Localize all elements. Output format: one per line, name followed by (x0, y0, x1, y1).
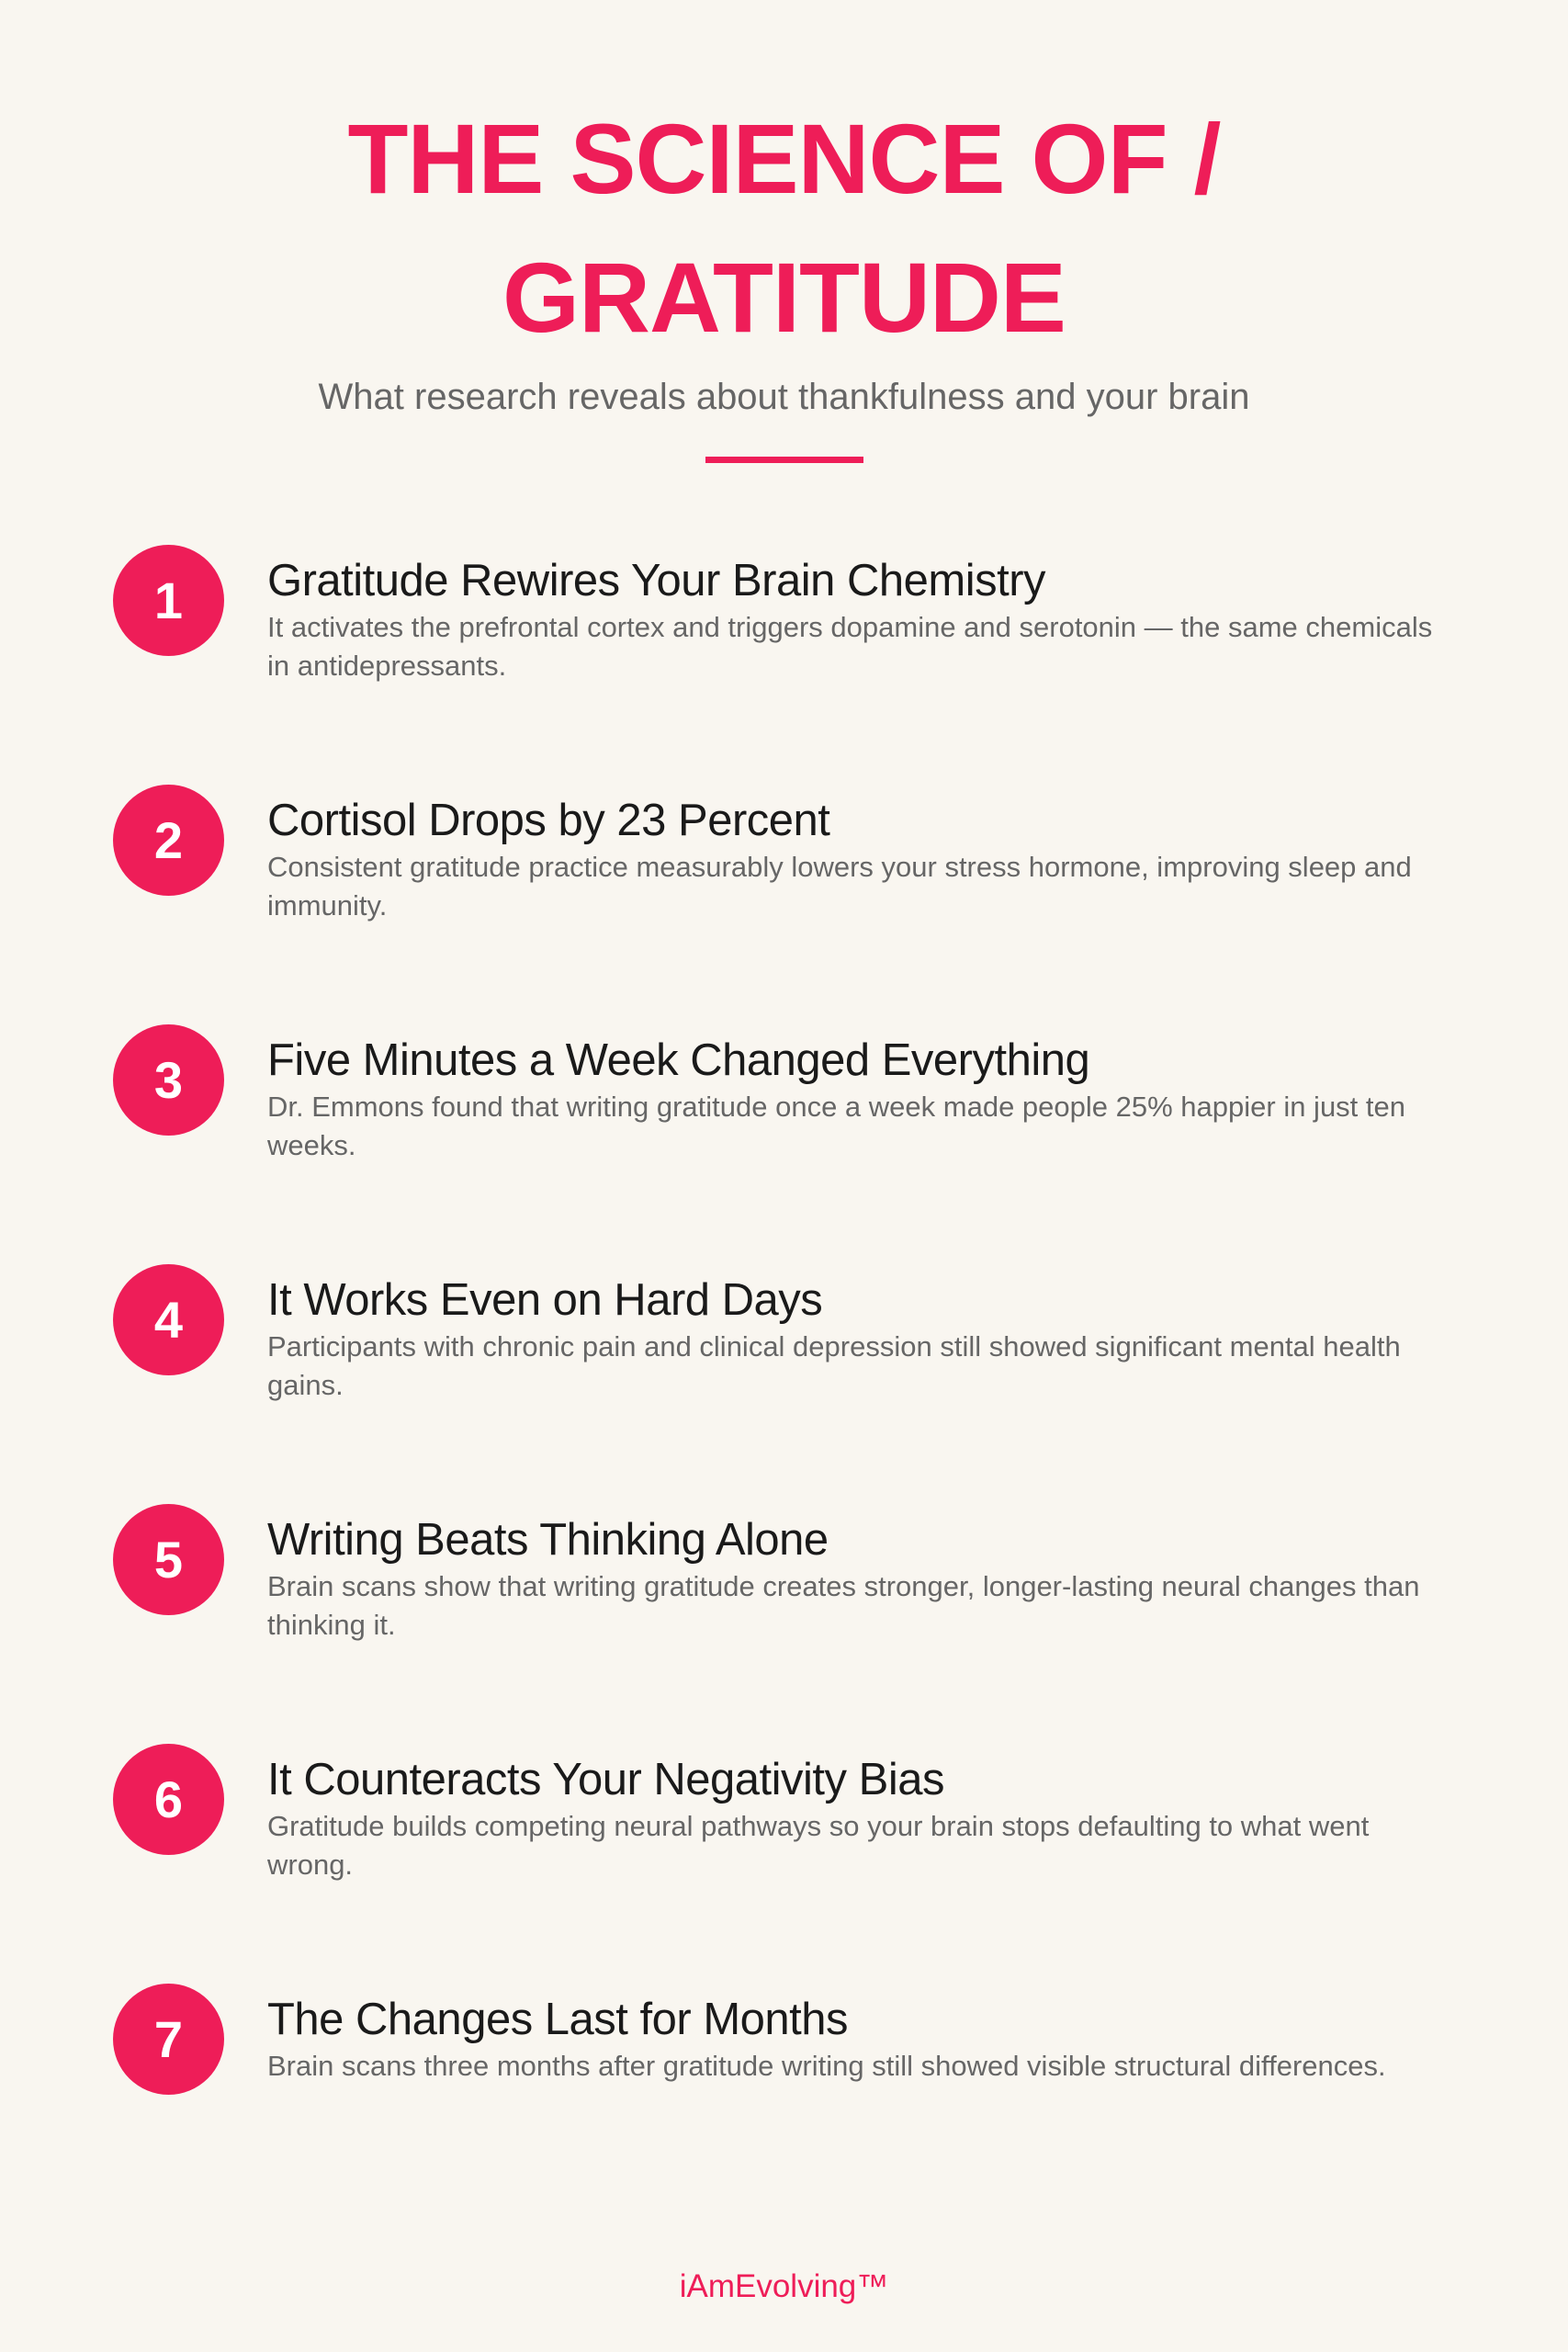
subtitle: What research reveals about thankfulness and your brain (319, 377, 1249, 417)
heading 7: The Changes Last for Months (267, 1995, 848, 2044)
badge 6: 6 (154, 1770, 183, 1828)
badge 7: 7 (154, 2010, 183, 2068)
badge 4 (113, 1264, 224, 1375)
item 7 (113, 1984, 1386, 2095)
body 3: Dr. Emmons found that writing gratitude once a week made people 25% happier in just ten weeks. (267, 1091, 1405, 1161)
body 5: Brain scans show that writing gratitude creates stronger, longer-lasting neural changes than thinking it. (267, 1570, 1420, 1641)
badge 3 (113, 1024, 224, 1136)
badge 7 (113, 1984, 224, 2095)
heading 1: Gratitude Rewires Your Brain Chemistry (267, 556, 1045, 605)
badge 1: 1 (154, 571, 183, 629)
body 7: Brain scans three months after gratitude writing still showed visible structural differences. (267, 2050, 1386, 2082)
body 2: Consistent gratitude practice measurably lowers your stress hormone, improving sleep and immunity. (267, 851, 1412, 922)
badge 1 (113, 545, 224, 656)
item 6 (113, 1744, 1369, 1881)
item 4 (113, 1264, 1401, 1401)
heading 4: It Works Even on Hard Days (267, 1275, 822, 1325)
badge 6 (113, 1744, 224, 1855)
heading 2: Cortisol Drops by 23 Percent (267, 796, 829, 845)
badge 5 (113, 1504, 224, 1615)
badge 5: 5 (154, 1531, 183, 1589)
title line 2: GRATITUDE (502, 242, 1066, 353)
title line 1: THE SCIENCE OF / (347, 103, 1221, 214)
badge 4: 4 (154, 1291, 183, 1349)
accent underline (705, 457, 863, 463)
item 1 (113, 545, 1432, 682)
heading 6: It Counteracts Your Negativity Bias (267, 1755, 944, 1804)
badge 3: 3 (154, 1051, 183, 1109)
body 6: Gratitude builds competing neural pathways so your brain stops defaulting to what went wrong. (267, 1810, 1369, 1881)
item 2 (113, 785, 1412, 922)
item 5 (113, 1504, 1420, 1641)
badge 2 (113, 785, 224, 896)
item 3 (113, 1024, 1405, 1161)
badge 2: 2 (154, 811, 183, 869)
footer brand: iAmEvolving™ (680, 2268, 888, 2304)
body 1: It activates the prefrontal cortex and triggers dopamine and serotonin — the same chemicals in antidepressants. (267, 611, 1432, 682)
heading 5: Writing Beats Thinking Alone (267, 1515, 829, 1565)
heading 3: Five Minutes a Week Changed Everything (267, 1035, 1089, 1085)
body 4: Participants with chronic pain and clinical depression still showed significant mental health gains. (267, 1330, 1401, 1401)
